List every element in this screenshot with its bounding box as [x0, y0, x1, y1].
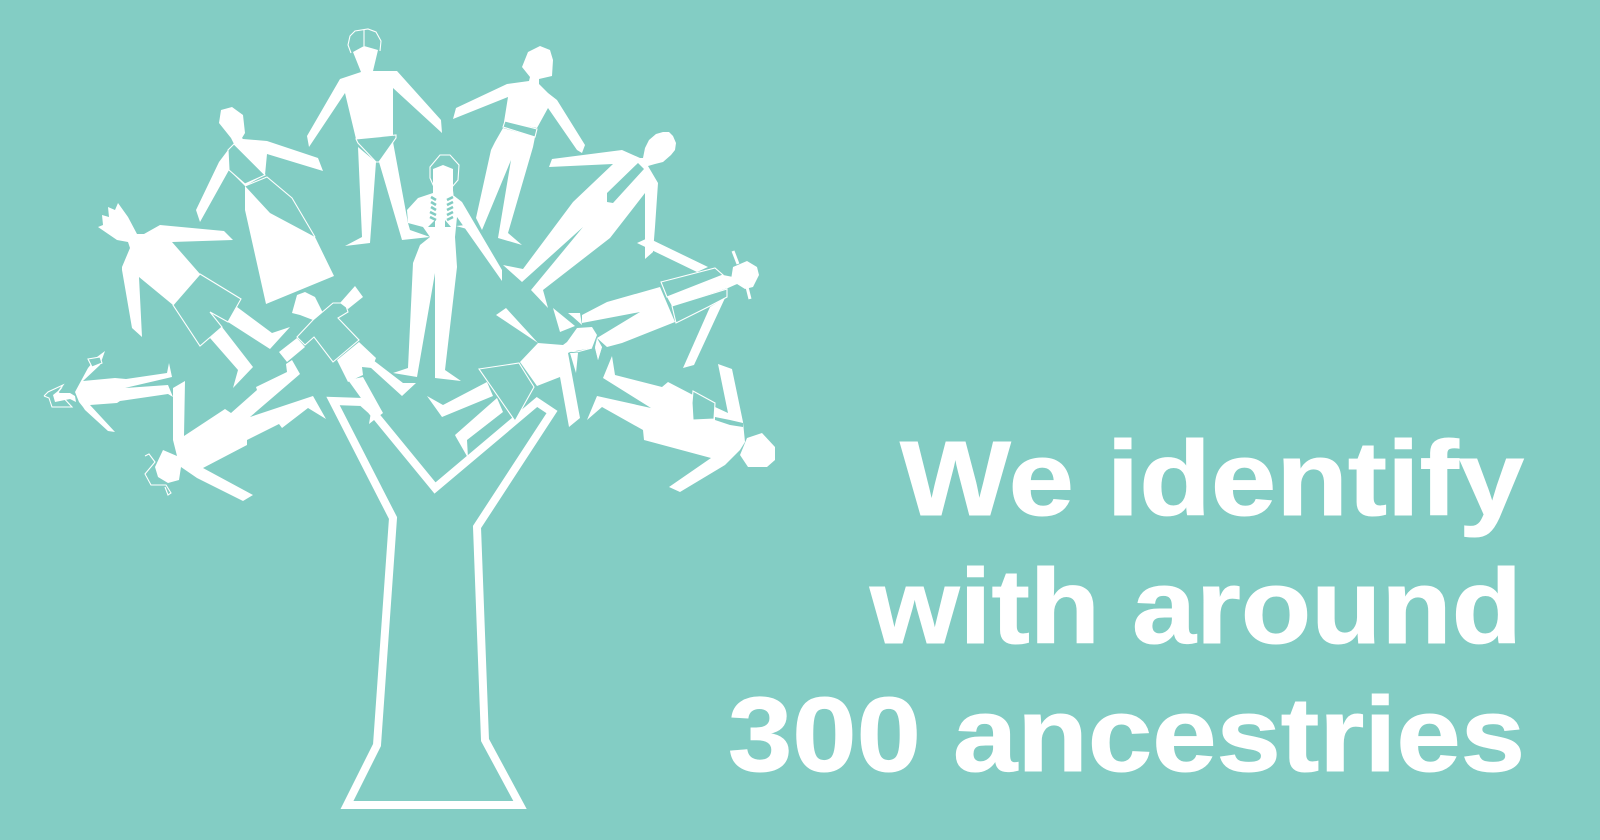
figure: woman with belt — [453, 46, 585, 245]
heading: We identify — [900, 420, 1524, 538]
icon: tree outline — [333, 401, 552, 805]
figure: child in t-shirt and shorts — [279, 286, 416, 424]
figure: man with cap and trunks — [307, 29, 442, 246]
heading — [728, 420, 1525, 794]
figure: man lying with pocket — [587, 356, 775, 492]
heading: with around — [869, 548, 1522, 666]
heading: 300 ancestries — [728, 676, 1525, 794]
figure: woman in dress — [196, 107, 334, 304]
figure: man with crown and shorts — [98, 203, 290, 388]
figure: large man with hat — [145, 360, 326, 501]
figure: figure with vest and shorts — [553, 238, 759, 368]
figure: man with tie — [503, 132, 676, 308]
figure: girl in skirt — [427, 308, 602, 458]
figure: small figure with spiky hair — [44, 351, 173, 432]
figure: woman with skeleton ribs — [393, 155, 502, 381]
